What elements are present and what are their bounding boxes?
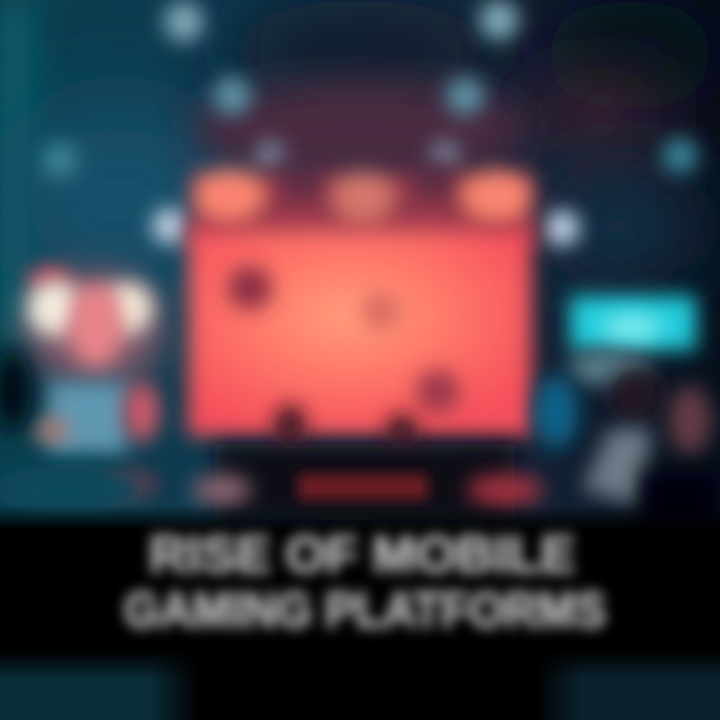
- screen body: [188, 228, 532, 436]
- background: [0, 0, 720, 530]
- dark silhouette: left: [0, 350, 145, 516]
- panel: central red screen: [188, 165, 535, 436]
- title: RISE OF MOBILE: [149, 526, 575, 584]
- title: [124, 526, 606, 638]
- screen dark spots: [228, 266, 460, 414]
- screen top lights: [190, 165, 535, 242]
- stage lights: [42, 0, 698, 246]
- character: left figure: [25, 266, 165, 499]
- title: GAMING PLATFORMS: [124, 582, 606, 638]
- stand and lower bar: [192, 405, 543, 520]
- black title band: [0, 505, 720, 720]
- character: right figure: [534, 296, 720, 530]
